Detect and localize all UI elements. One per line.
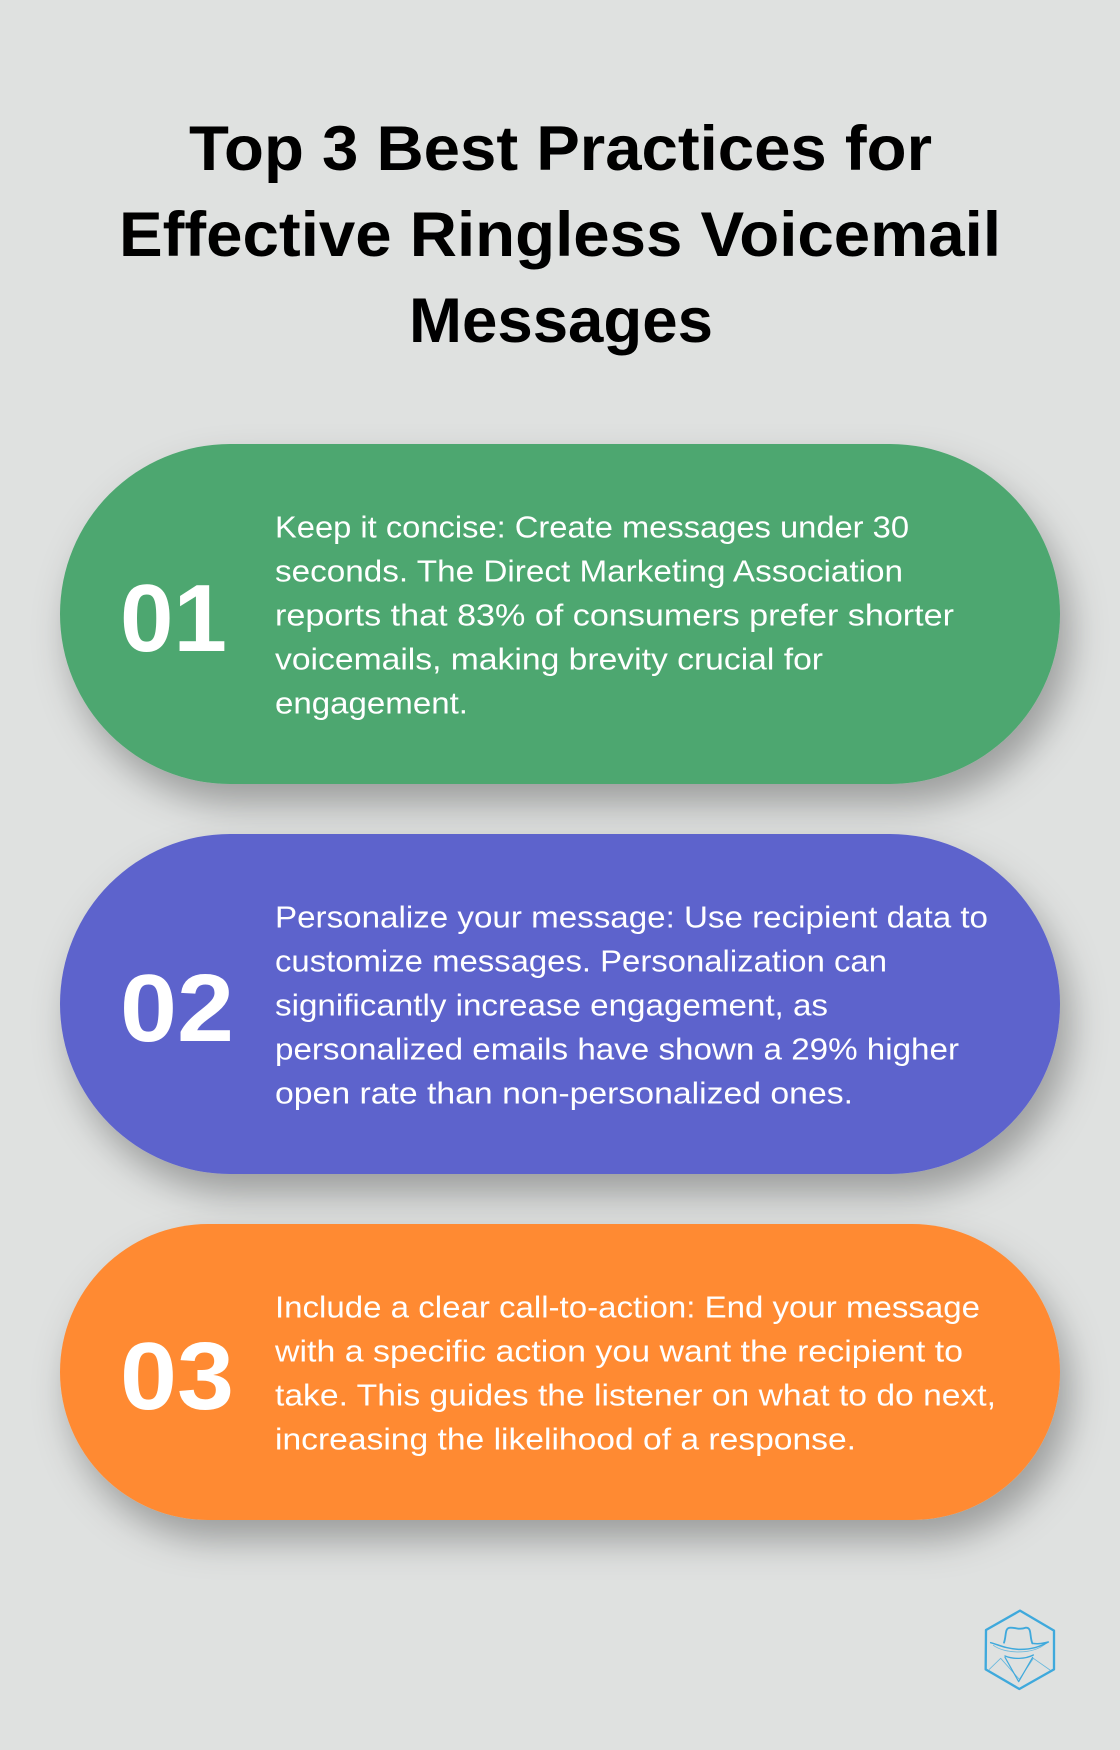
title <box>119 114 1001 356</box>
text: personalize your message: open rate than non-personalized ones. <box>275 1076 853 1110</box>
title: Effective Ringless Voicemail <box>119 200 1001 270</box>
text: keep it concise: seconds. The Direct Marketing Association <box>275 554 903 588</box>
green pill background <box>60 444 1060 784</box>
text: keep it concise: voicemails, making brevity crucial for <box>275 642 823 676</box>
text: keep it concise: reports that 83% of consumers prefer shorter <box>275 598 954 632</box>
number 01: 01 <box>120 565 227 672</box>
text: personalize your message: personalized emails have shown a 29% higher <box>275 1032 959 1066</box>
text: personalize your message: Personalize your message: Use recipient data to <box>275 900 988 934</box>
panel: practice 01 keep it concise <box>60 444 1060 784</box>
panel: practice 03 clear call-to-action <box>60 1224 1060 1520</box>
text: keep it concise: engagement. <box>275 686 468 720</box>
blue pill background <box>60 834 1060 1174</box>
title: Messages <box>409 286 713 356</box>
title: Top 3 Best Practices for <box>189 114 932 184</box>
orange pill background <box>60 1224 1060 1520</box>
panel: practice 02 personalize your message <box>60 834 1060 1174</box>
number 03: 03 <box>120 1323 234 1430</box>
text: clear call-to-action: take. This guides the listener on what to do next, <box>275 1378 996 1412</box>
text: clear call-to-action <box>274 1290 996 1456</box>
text: clear call-to-action: increasing the likelihood of a response. <box>275 1422 856 1456</box>
text: personalize your message: significantly increase engagement, as <box>275 988 828 1022</box>
number 02: 02 <box>120 955 234 1062</box>
text: keep it concise: Keep it concise: Create messages under 30 <box>275 510 909 544</box>
text: keep it concise <box>275 510 954 720</box>
text: personalize your message <box>275 900 988 1110</box>
icon: hexagon spy logo <box>986 1611 1054 1689</box>
text: clear call-to-action: Include a clear call-to-action: End your message <box>275 1290 980 1324</box>
text: clear call-to-action: with a specific action you want the recipient to <box>274 1334 963 1368</box>
text: personalize your message: customize messages. Personalization can <box>275 944 887 978</box>
